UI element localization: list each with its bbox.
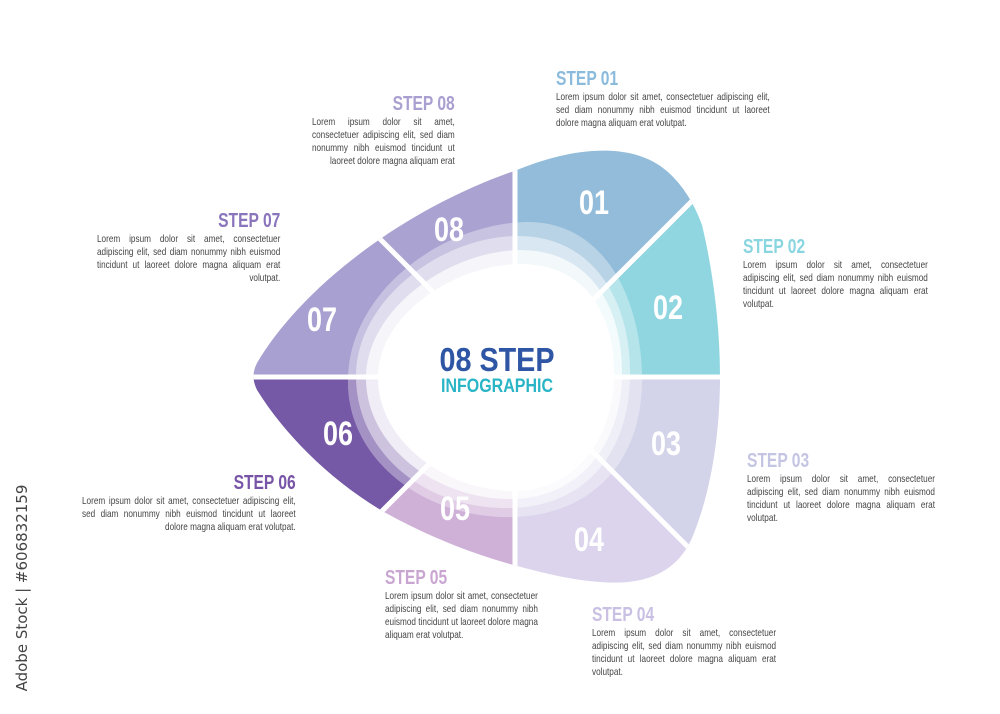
segment numbers: 02	[653, 289, 683, 327]
step 04 text: STEP 04	[592, 604, 654, 626]
step 03 text	[747, 450, 935, 524]
step 04 text	[592, 604, 776, 678]
center blob	[348, 222, 642, 517]
segment numbers: 01	[579, 184, 609, 222]
segment 04	[518, 458, 688, 583]
step 02 text	[743, 236, 928, 310]
segment 05	[382, 474, 517, 566]
step 03 text: Lorem ipsum dolor sit amet, consectetuer adipiscing elit, sed diam nonummy nibh euismod tincidunt ut laoreet dolore magna aliquam erat volutpat.	[747, 473, 935, 524]
step 08 text: STEP 08	[393, 93, 455, 115]
step 07 text	[97, 210, 280, 284]
step 02 text: STEP 02	[743, 236, 805, 258]
segment 06	[254, 376, 426, 511]
segment 01	[517, 150, 692, 297]
segment numbers: 03	[651, 425, 681, 463]
segment numbers: 06	[323, 415, 353, 453]
segment 08	[380, 170, 517, 290]
step 07 text: Lorem ipsum dolor sit amet, consectetuer adipiscing elit, sed diam nonummy nibh euismod tincidunt ut laoreet dolore magna aliquam erat volutpat.	[97, 233, 280, 284]
step 04 text: Lorem ipsum dolor sit amet, consectetuer adipiscing elit, sed diam nonummy nibh euismod tincidunt ut laoreet dolore magna aliquam erat volutpat.	[592, 627, 776, 678]
center title	[440, 341, 554, 397]
step 08 text	[312, 93, 455, 167]
step 01 text	[556, 68, 770, 129]
center title: INFOGRAPHIC	[441, 376, 553, 397]
segment 02	[596, 202, 720, 374]
segment numbers: 08	[434, 211, 464, 249]
watermark id: Adobe Stock | #606832159	[13, 485, 31, 691]
step 07 text: STEP 07	[218, 210, 280, 232]
step 01 text: STEP 01	[556, 68, 618, 90]
step 08 text: Lorem ipsum dolor sit amet, consectetuer adipiscing elit, sed diam nonummy nibh euismod tincidunt ut laoreet dolore magna aliquam erat	[312, 116, 455, 167]
segment numbers: 04	[574, 521, 604, 559]
segment 07	[254, 239, 430, 376]
step 06 text: Lorem ipsum dolor sit amet, consectetuer adipiscing elit, sed diam nonummy nibh euismod tincidunt ut laoreet dolore magna aliquam erat volutpat.	[82, 495, 296, 533]
step 05 text: STEP 05	[385, 567, 447, 589]
segment numbers: 07	[307, 301, 337, 339]
segment numbers	[307, 184, 683, 559]
step 05 text	[385, 567, 538, 641]
segment 03	[599, 380, 720, 546]
step 05 text: Lorem ipsum dolor sit amet, consectetuer adipiscing elit, sed diam nonummy nibh euismod tincidunt ut laoreet dolore magna aliquam erat volutpat.	[385, 590, 538, 641]
center title: 08 STEP	[440, 341, 554, 378]
segment numbers: 05	[440, 490, 470, 528]
step 02 text: Lorem ipsum dolor sit amet, consectetuer adipiscing elit, sed diam nonummy nibh euismod tincidunt ut laoreet dolore magna aliquam erat volutpat.	[743, 259, 928, 310]
step 01 text: Lorem ipsum dolor sit amet, consectetuer adipiscing elit, sed diam nonummy nibh euismod tincidunt ut laoreet dolore magna aliquam erat volutpat.	[556, 91, 770, 129]
step 03 text: STEP 03	[747, 450, 809, 472]
step 06 text: STEP 06	[234, 472, 296, 494]
diagram: segmented ring	[254, 150, 720, 583]
step 06 text	[82, 472, 296, 533]
